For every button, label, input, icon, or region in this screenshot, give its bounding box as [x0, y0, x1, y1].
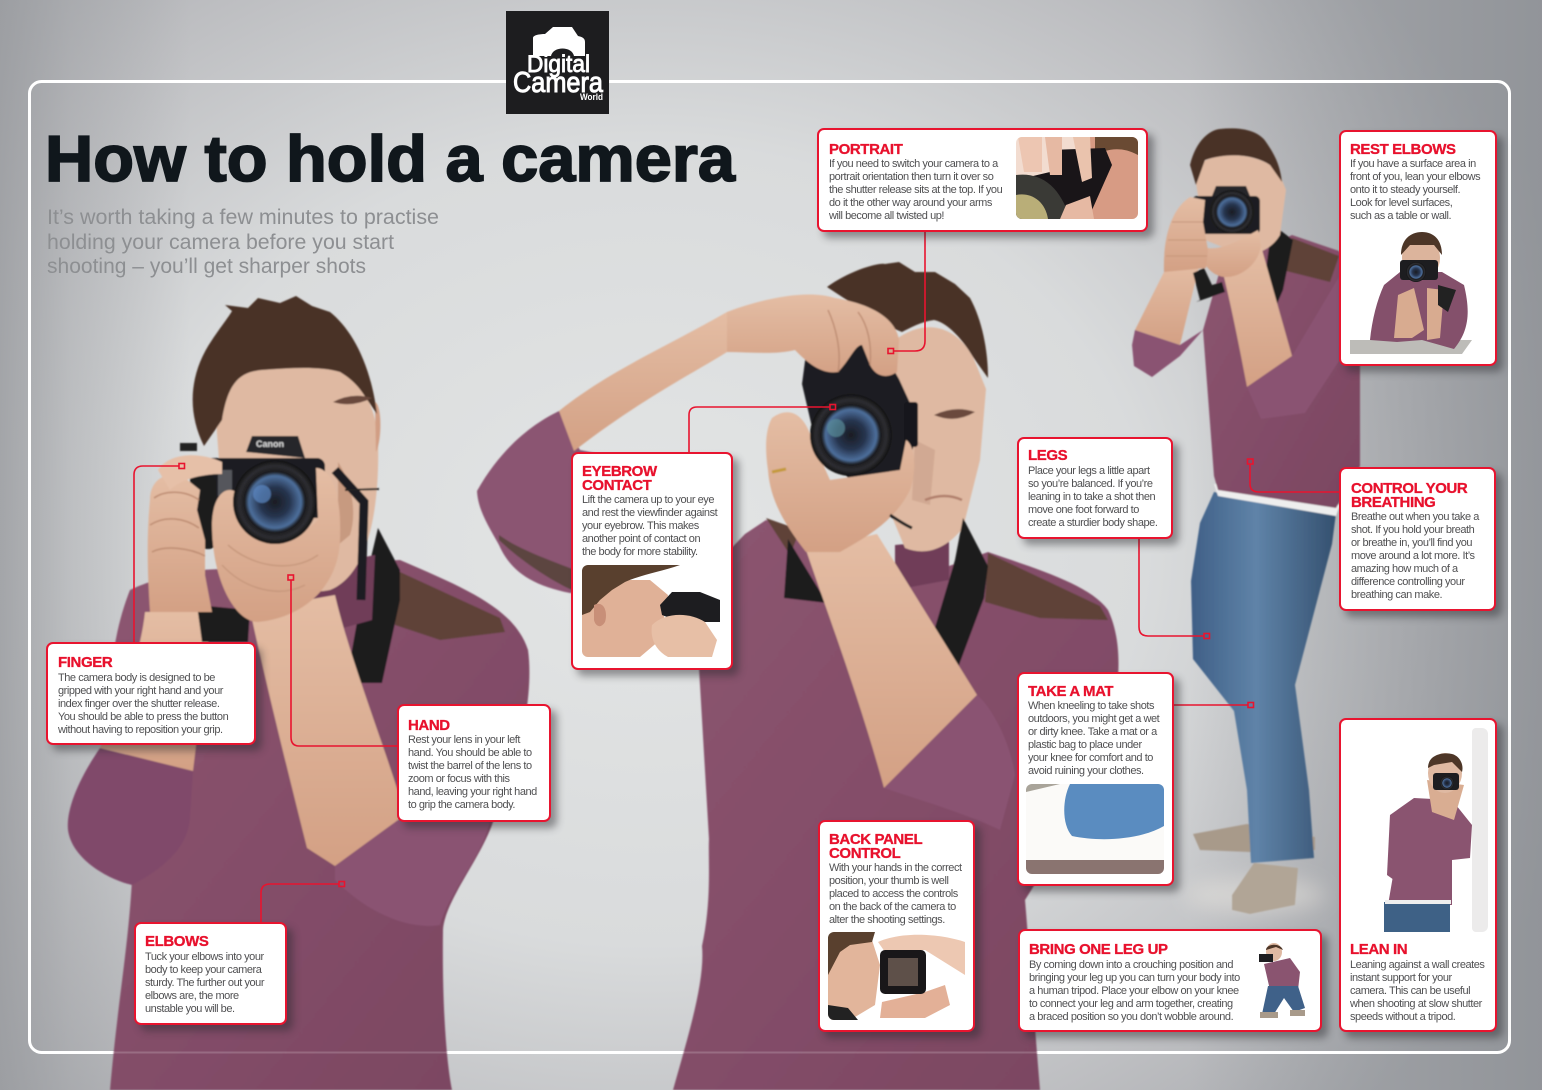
figure: left photographer — [68, 296, 529, 1090]
heading: elbows: ELBOWS — [145, 933, 208, 950]
text: control your breathing: or breathe in, you’ll find you — [1351, 537, 1472, 549]
panel: legs — [1017, 437, 1173, 539]
text: elbows: body to keep your camera — [145, 964, 261, 976]
figure: left photographer: Canon — [256, 439, 284, 449]
text: back panel control: alter the shooting settings. — [829, 914, 945, 926]
text: eyebrow contact — [582, 494, 718, 558]
panel: bring one leg up — [1018, 929, 1322, 1032]
text: elbows: Tuck your elbows into your — [145, 950, 264, 962]
photo: portrait grip — [1016, 137, 1138, 219]
text: lean in: Leaning against a wall creates — [1350, 959, 1484, 971]
text: hand: twist the barrel of the lens to — [408, 760, 532, 772]
connector: finger — [134, 464, 184, 642]
photo: thumb on back of camera — [828, 932, 965, 1020]
text: elbows — [145, 950, 264, 1014]
text: hand: hand, leaving your right hand — [408, 786, 537, 798]
text: elbows: sturdy. The further out your — [145, 976, 264, 988]
text: hand: hand. You should be able to — [408, 747, 532, 759]
text: elbows: unstable you will be. — [145, 1002, 235, 1014]
text: hand: Rest your lens in your left — [408, 734, 520, 746]
heading: control your breathing — [1351, 480, 1468, 510]
text: control your breathing: breathing can make. — [1351, 589, 1442, 601]
heading: rest elbows: REST ELBOWS — [1350, 140, 1456, 158]
panel: take a mat — [1017, 672, 1174, 886]
text: take a mat: your knee for comfort and to — [1028, 752, 1153, 764]
text: finger: The camera body is designed to be — [58, 672, 215, 684]
connector: take a mat — [1173, 702, 1254, 708]
subtitle: shooting – you’ll get sharper shots — [47, 254, 366, 278]
text: rest elbows: front of you, lean your elbows — [1350, 171, 1480, 183]
text: finger: gripped with your right hand and your — [58, 684, 223, 696]
text: take a mat: avoid ruining your clothes. — [1028, 765, 1144, 777]
text: rest elbows — [1350, 158, 1480, 222]
text: lean in: instant support for your — [1350, 972, 1452, 984]
heading: eyebrow contact — [582, 462, 658, 494]
text: back panel control — [829, 862, 962, 926]
heading: back panel control: CONTROL — [829, 844, 900, 862]
text: eyebrow contact: the body for more stability. — [582, 546, 698, 558]
text: rest elbows: If you have a surface area in — [1350, 158, 1476, 170]
photo: knee on mat — [1026, 784, 1164, 874]
connector: portrait — [888, 231, 925, 354]
subtitle: It’s worth taking a few minutes to practise — [47, 205, 439, 229]
heading: eyebrow contact: CONTACT — [582, 476, 651, 494]
figure: right photographer standing — [1132, 128, 1360, 914]
panel: hand — [397, 704, 551, 822]
text: back panel control: position, your thumb is well — [829, 875, 948, 887]
heading: back panel control — [829, 830, 922, 862]
text: take a mat: outdoors, you might get a wet — [1028, 713, 1159, 725]
text: hand: zoom or focus with this — [408, 773, 510, 785]
title: How to hold a camera — [45, 122, 736, 195]
photo: leaning against a wall — [1384, 728, 1488, 932]
text: lean in: speeds without a tripod. — [1350, 1011, 1455, 1023]
text: rest elbows: Look for level surfaces, — [1350, 197, 1452, 209]
heading: take a mat: TAKE A MAT — [1028, 682, 1113, 700]
panel: control your breathing — [1339, 467, 1496, 611]
heading: hand: HAND — [408, 716, 450, 734]
photo: camera at eyebrow — [582, 565, 720, 657]
text: portrait: If you need to switch your camera to a — [829, 158, 998, 170]
text: control your breathing: move around a lot more. It’s — [1351, 550, 1475, 562]
text: take a mat: plastic bag to place under — [1028, 739, 1142, 751]
panel: rest elbows — [1339, 130, 1497, 366]
heading: lean in: LEAN IN — [1350, 941, 1407, 958]
panel: elbows — [134, 922, 287, 1025]
heading: bring one leg up: BRING ONE LEG UP — [1029, 940, 1168, 958]
heading: eyebrow contact: EYEBROW — [582, 462, 657, 480]
heading: portrait: PORTRAIT — [829, 141, 902, 158]
text: portrait: the shutter release sits at the top. If you — [829, 184, 1002, 196]
text: finger: without having to reposition your grip. — [58, 724, 223, 736]
text: bring one leg up: bringing your leg up you can turn your body into — [1029, 972, 1240, 984]
text: eyebrow contact: your eyebrow. This makes — [582, 520, 699, 532]
text: lean in — [1350, 959, 1484, 1023]
panel: lean in — [1339, 718, 1497, 1032]
text: legs: create a sturdier body shape. — [1028, 516, 1157, 528]
connector: eyebrow contact — [689, 404, 836, 452]
text: elbows: elbows are, the more — [145, 990, 239, 1002]
text: hand — [408, 734, 537, 811]
text: legs: leaning in to take a shot then — [1028, 490, 1155, 502]
text: legs: Place your legs a little apart — [1028, 464, 1150, 476]
text: finger: index finger over the shutter release. — [58, 698, 219, 710]
text: finger — [58, 672, 228, 736]
connector: legs — [1139, 538, 1210, 638]
photo: man resting elbows on table — [1350, 232, 1472, 354]
heading: back panel control: BACK PANEL — [829, 830, 922, 848]
text: take a mat — [1028, 700, 1160, 777]
text: bring one leg up: to connect your leg and arm together, creating — [1029, 998, 1233, 1010]
text: bring one leg up — [1029, 959, 1240, 1023]
text: rest elbows: onto it to steady yourself. — [1350, 184, 1460, 196]
text: hand: to grip the camera body. — [408, 799, 515, 811]
text: bring one leg up: By coming down into a crouching position and — [1029, 959, 1233, 971]
text: legs: move one foot forward to — [1028, 504, 1139, 516]
text: control your breathing: difference controlling your — [1351, 576, 1465, 588]
logo: Digital Camera World: Digital — [527, 51, 590, 78]
text: back panel control: With your hands in the correct — [829, 862, 962, 874]
subtitle — [47, 205, 439, 278]
heading: control your breathing: CONTROL YOUR — [1351, 480, 1467, 496]
text: lean in: camera. This can be useful — [1350, 985, 1470, 997]
text: take a mat: or dirty knee. Take a mat or a — [1028, 726, 1157, 738]
photo: crouching photographer — [1259, 943, 1305, 1018]
text: portrait: do it the other way around your arms — [829, 196, 992, 208]
text: bring one leg up: a human tripod. Place your elbow on your knee — [1029, 985, 1239, 997]
text: control your breathing: Breathe out when you take a — [1351, 511, 1479, 523]
heading: legs: LEGS — [1028, 447, 1067, 464]
panel: portrait — [817, 128, 1148, 232]
text: bring one leg up: a braced position so you don’t wobble around. — [1029, 1011, 1233, 1023]
text: take a mat: When kneeling to take shots — [1028, 700, 1154, 712]
text: control your breathing — [1351, 511, 1480, 601]
panel: eyebrow contact — [571, 452, 733, 670]
panel: finger — [46, 642, 256, 745]
text: rest elbows: such as a table or wall. — [1350, 210, 1451, 222]
text: eyebrow contact: Lift the camera up to your eye — [582, 494, 714, 506]
text: eyebrow contact: another point of contact on — [582, 533, 700, 545]
text: finger: You should be able to press the button — [58, 710, 228, 722]
connector: control your breathing — [1248, 459, 1339, 492]
logo: Digital Camera World — [506, 11, 609, 114]
text: eyebrow contact: and rest the viewfinder against — [582, 507, 717, 519]
text: portrait: portrait orientation then turn it over so — [829, 170, 993, 182]
logo: Digital Camera World: World — [580, 92, 603, 102]
text: portrait: will become all twisted up! — [829, 210, 944, 222]
text: legs — [1028, 464, 1157, 528]
heading: control your breathing: BREATHING — [1351, 494, 1435, 510]
connector: elbows — [261, 882, 344, 922]
text: control your breathing: amazing how much of a — [1351, 563, 1458, 575]
text: legs: so you’re balanced. If you’re — [1028, 478, 1153, 490]
text: back panel control: on the back of the camera to — [829, 901, 956, 913]
connector: hand — [288, 575, 397, 746]
text: back panel control: placed to access the controls — [829, 888, 958, 900]
text: portrait — [829, 158, 1002, 222]
heading: finger: FINGER — [58, 654, 112, 671]
text: lean in: when shooting at slow shutter — [1350, 998, 1482, 1010]
figure: centre photographer — [477, 262, 1118, 1090]
subtitle: holding your camera before you start — [47, 230, 394, 254]
text: control your breathing: shot. If you hold your breath — [1351, 524, 1474, 536]
panel: back panel control — [818, 820, 975, 1032]
